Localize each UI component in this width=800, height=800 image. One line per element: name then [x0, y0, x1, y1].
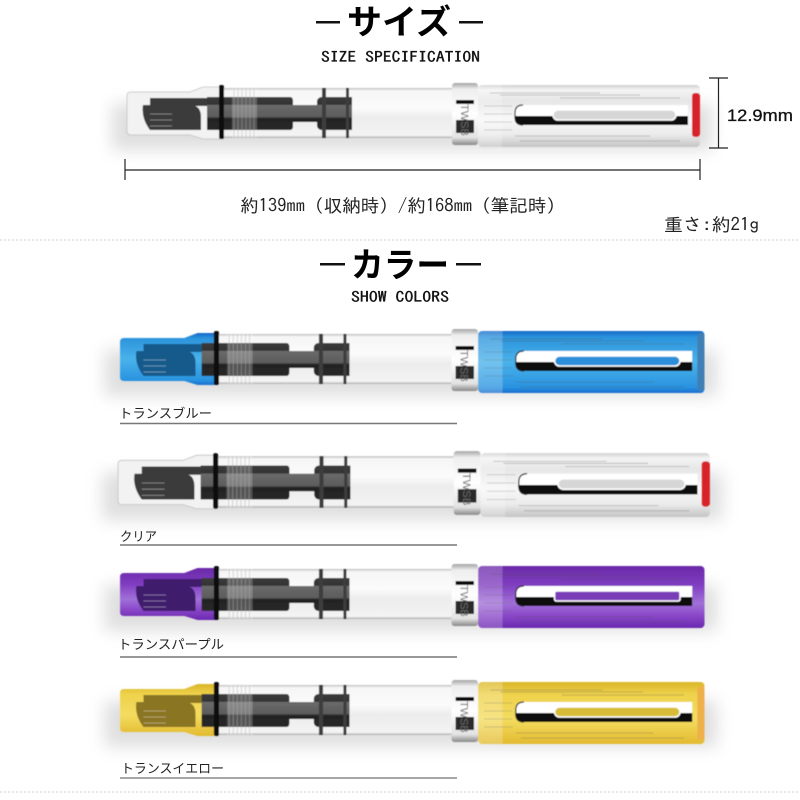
dimension: diameter 12.9mm: 12.9mm [727, 106, 793, 125]
pen: trans blue [105, 329, 717, 396]
dimension: length line [125, 159, 700, 180]
subtitle: size specification: SIZE SPECIFICATION [321, 49, 480, 64]
subtitle: show colors: SHOW COLORS [351, 289, 449, 304]
pen: clear [102, 451, 722, 520]
length text: 約139mm（収納時）/約168mm（筆記時） [240, 196, 565, 215]
label: trans blue: トランスブルー [119, 403, 212, 422]
weight text: 重さ:約21g [664, 215, 759, 234]
pen: trans purple [105, 564, 717, 631]
label: trans purple: トランスパープル [118, 634, 224, 653]
dimension: diameter 12.9mm [709, 78, 793, 148]
label: trans yellow: トランスイエロー [121, 758, 224, 777]
title: colors: カラー [351, 238, 449, 287]
pen: clear, dimension view [112, 83, 712, 150]
label: clear: クリア [120, 526, 157, 545]
pen: trans yellow [105, 680, 717, 747]
